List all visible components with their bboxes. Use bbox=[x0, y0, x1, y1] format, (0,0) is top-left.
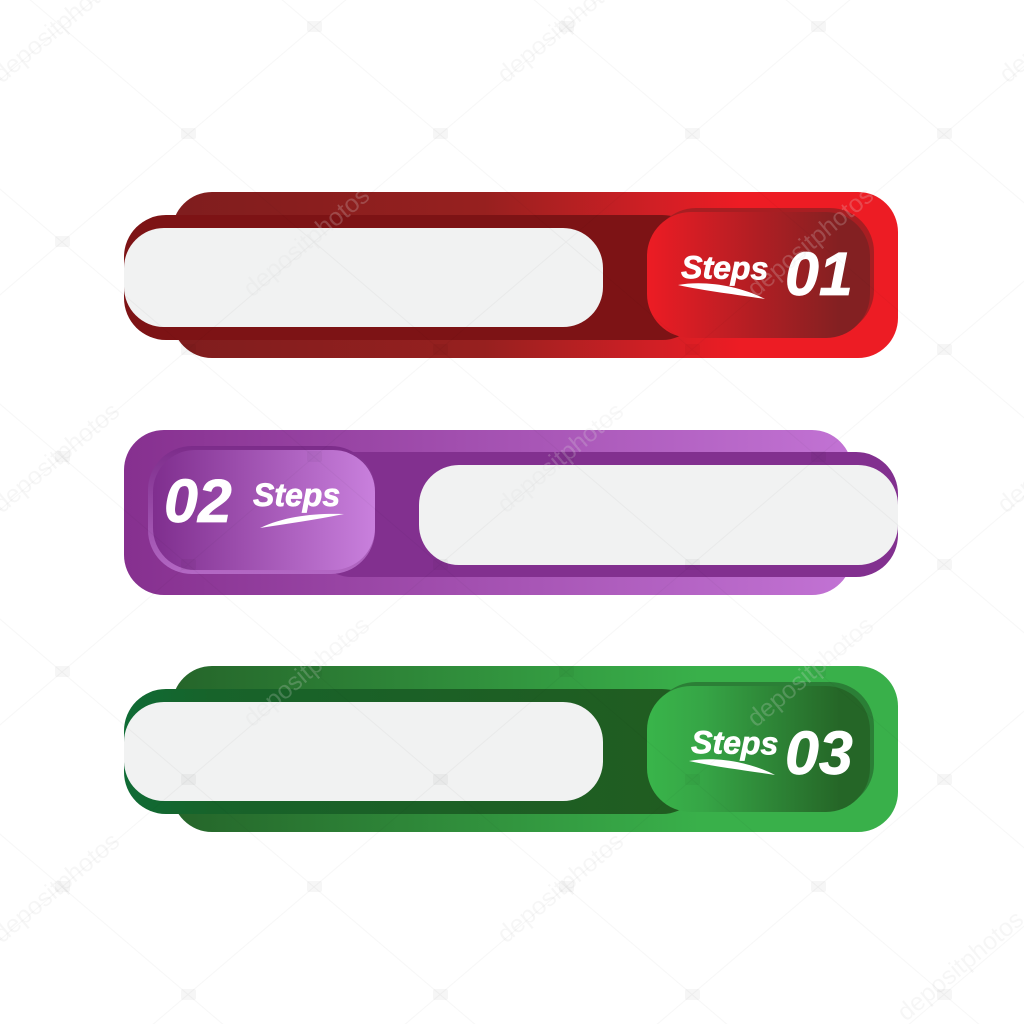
red badge rim bbox=[652, 208, 874, 334]
watermark text: depositphotos bbox=[492, 397, 629, 519]
watermark text: depositphotos bbox=[742, 611, 879, 733]
banner 2: purple steps 02 bbox=[124, 430, 898, 595]
red badge face bbox=[647, 212, 870, 338]
red inner dark bar bbox=[124, 215, 704, 340]
green outer bar bbox=[172, 666, 898, 832]
watermark text: depositphotos bbox=[742, 611, 879, 733]
watermark text: depositphotos bbox=[492, 827, 629, 949]
green badge number: 03 bbox=[785, 719, 853, 787]
purple badge label: Steps bbox=[253, 477, 340, 513]
watermark text: depositphotos bbox=[238, 611, 375, 733]
purple inner dark bar bbox=[310, 452, 898, 577]
watermark text: depositphotos bbox=[492, 397, 629, 519]
watermark text: depositphotos bbox=[742, 181, 879, 303]
green badge face bbox=[647, 686, 870, 812]
watermark text: depositphotos bbox=[238, 181, 375, 303]
purple text field bbox=[419, 465, 898, 565]
green badge label: Steps bbox=[691, 724, 779, 762]
green swoosh bbox=[689, 759, 775, 775]
banner 3: green steps 03 bbox=[124, 666, 898, 832]
green step badge bbox=[647, 682, 874, 812]
purple swoosh bbox=[260, 514, 344, 528]
banner 1: red steps 01 bbox=[124, 192, 898, 358]
red badge label: Steps bbox=[681, 249, 769, 287]
red outer bar bbox=[172, 192, 898, 358]
green inner dark bar bbox=[124, 689, 704, 814]
purple badge face bbox=[153, 450, 375, 570]
red step badge bbox=[647, 208, 874, 338]
red swoosh bbox=[678, 283, 765, 299]
purple step badge bbox=[148, 446, 375, 574]
purple badge number: 02 bbox=[164, 467, 232, 535]
watermark text: depositphotos bbox=[742, 181, 879, 303]
green text field bbox=[124, 702, 603, 801]
watermark text: depositphotos bbox=[238, 611, 375, 733]
red text field bbox=[124, 228, 603, 327]
purple outer bar bbox=[124, 430, 852, 595]
red badge number: 01 bbox=[785, 240, 853, 308]
green badge rim bbox=[652, 682, 874, 808]
purple badge rim bbox=[148, 446, 375, 574]
watermark text: depositphotos bbox=[238, 181, 375, 303]
